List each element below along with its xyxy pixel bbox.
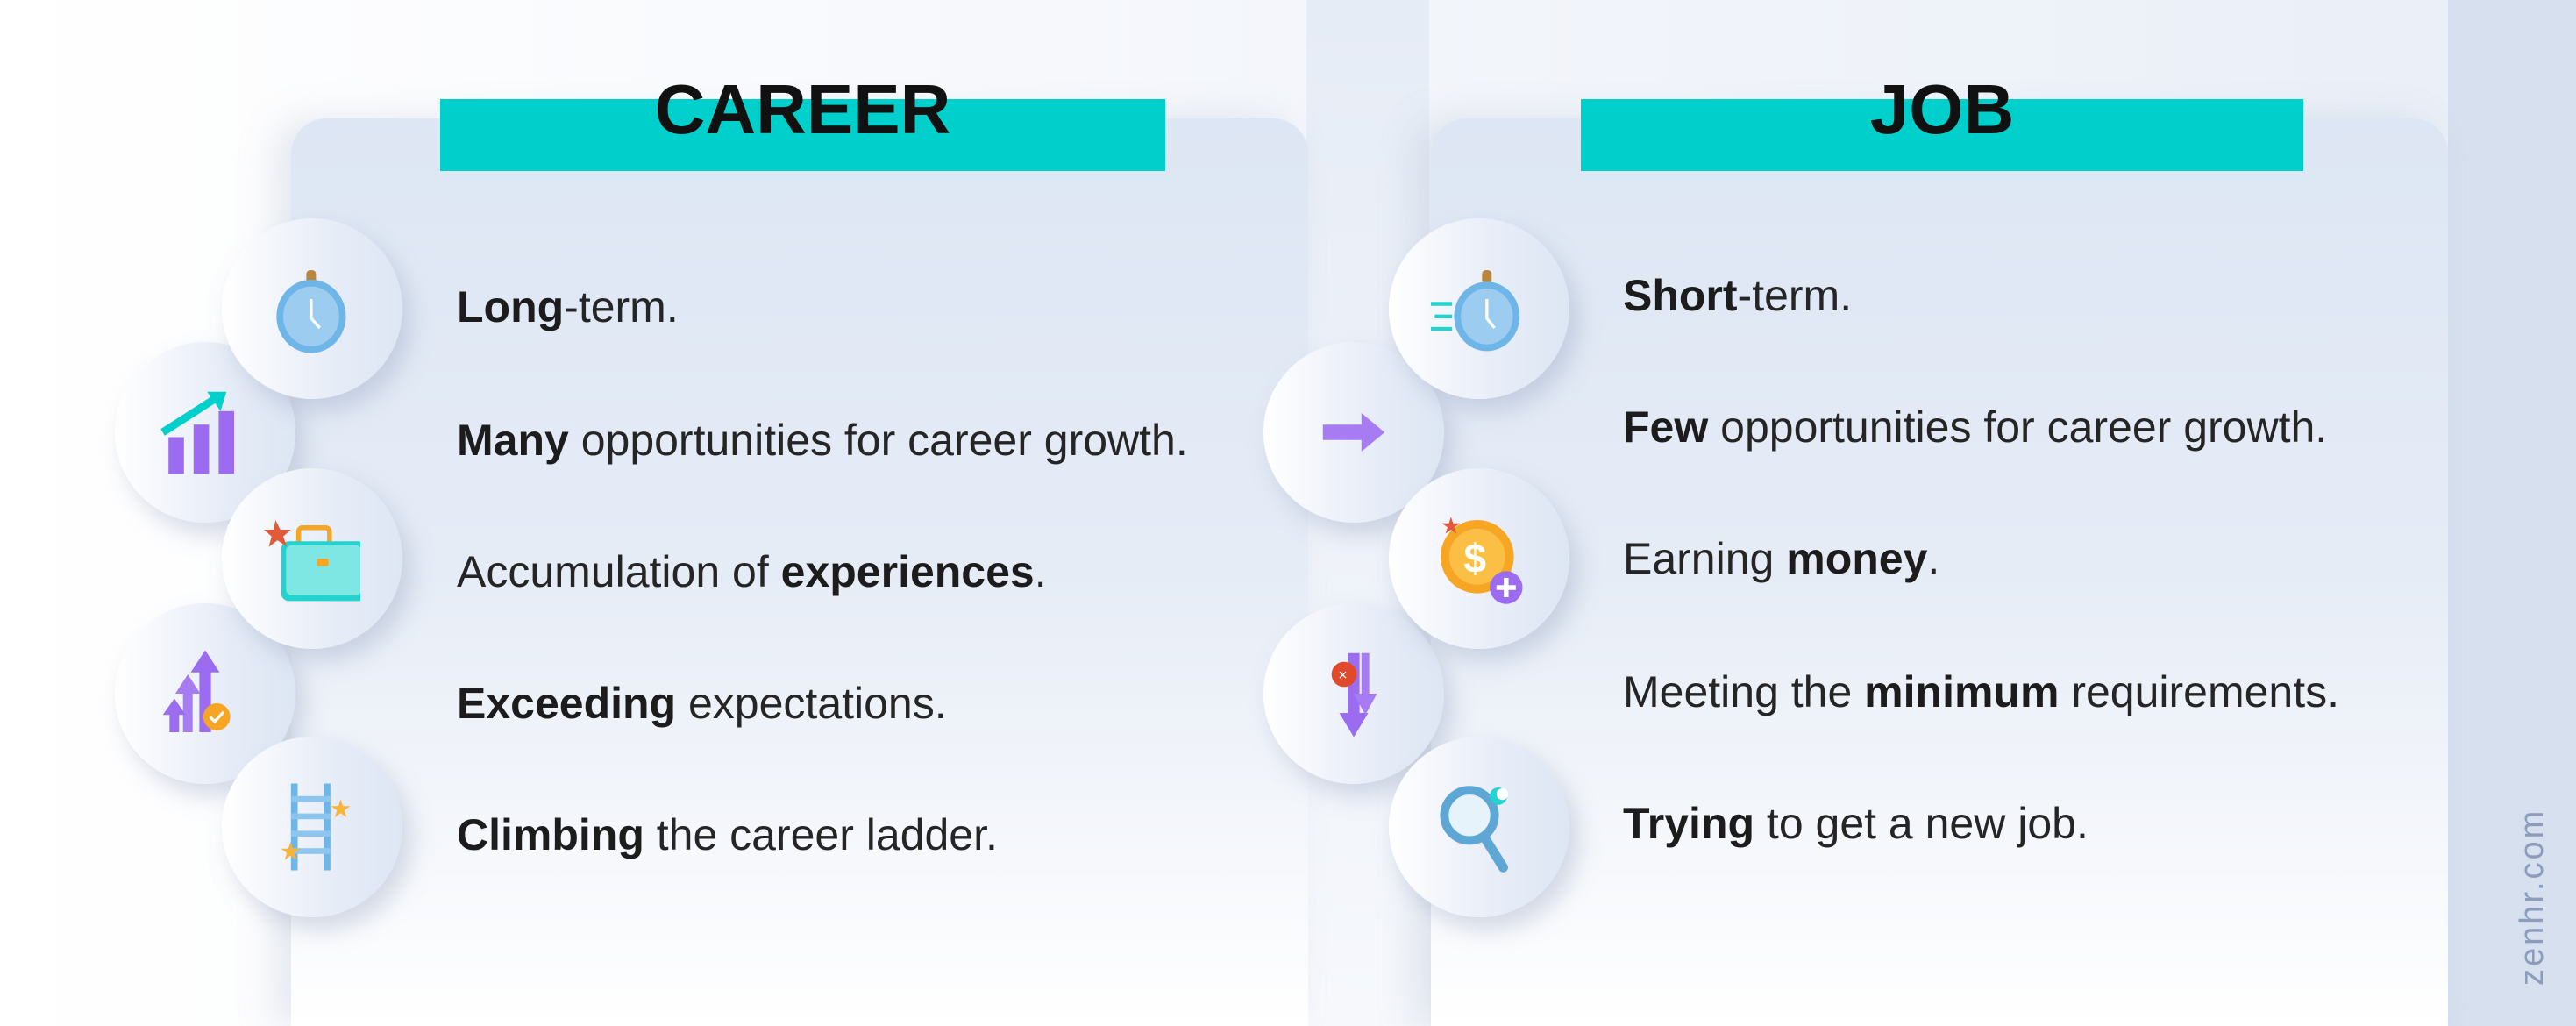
text: climbing: Climbing the career ladder. <box>457 810 998 859</box>
text: exceeding: Exceeding expectations. <box>457 679 947 728</box>
icon: stopwatch <box>222 218 402 399</box>
icon: arrows up <box>115 603 295 784</box>
heading bar: career <box>440 99 1165 171</box>
text: trying new job: Trying to get a new job. <box>1623 799 2089 848</box>
text: short-term: Short-term. <box>1623 271 1852 320</box>
icon: ladder: ★ <box>280 837 302 866</box>
icon: fast stopwatch <box>1389 218 1569 399</box>
icon: briefcase <box>222 468 402 649</box>
text: job items <box>1623 271 2339 848</box>
icon: right arrow <box>1263 342 1444 523</box>
panel: career <box>291 118 1308 1026</box>
icon: growth chart <box>115 342 295 523</box>
icon: money coin: $ <box>1463 535 1486 581</box>
icon: ladder <box>222 737 402 917</box>
icon: ladder: ★ <box>330 795 352 823</box>
icon: money coin: ★ <box>1441 512 1462 538</box>
text: long-term: Long-term. <box>457 282 679 331</box>
text: earning money: Earning money. <box>1623 534 1939 583</box>
icon: arrows down: × <box>1338 666 1348 684</box>
icon: money coin <box>1389 468 1569 649</box>
text: few opportunities: Few opportunities for career growth. <box>1623 403 2327 452</box>
text: accumulation: Accumulation of experiences. <box>457 547 1047 596</box>
text: career items <box>457 282 1188 859</box>
icon: magnifier <box>1389 737 1569 917</box>
watermark: zenhr.com: zenhr.com <box>2514 809 2551 986</box>
icon: arrows down <box>1263 603 1444 784</box>
title: job: JOB <box>1870 70 2014 148</box>
text: meeting minimum: Meeting the minimum requirements. <box>1623 667 2339 716</box>
panel: job <box>1431 118 2448 1026</box>
title: career: CAREER <box>655 70 950 148</box>
text: many opportunities: Many opportunities for career growth. <box>457 416 1188 465</box>
heading bar: job <box>1581 99 2303 171</box>
